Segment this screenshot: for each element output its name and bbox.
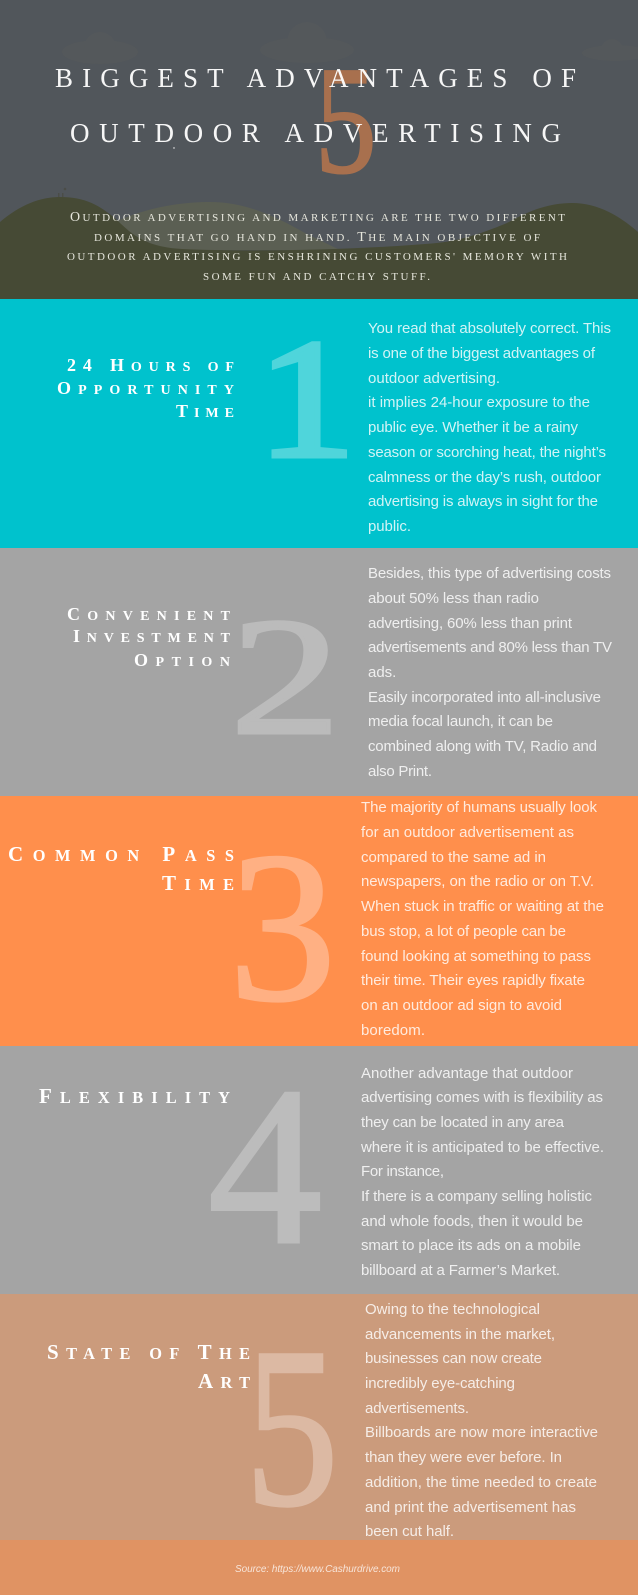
- body text: Owing to the technological: [365, 1301, 540, 1318]
- intro text: OUTDOOR ADVERTISING AND MARKETING ARE THE TWO DIFFERENT: [70, 210, 565, 225]
- heading: O PPORTUNITY: [57, 378, 234, 398]
- title: [55, 63, 576, 149]
- panel: 5 state of the art: [0, 1294, 638, 1554]
- body text: If there is a company selling holistic: [361, 1188, 592, 1205]
- body text: The majority of humans usually look: [361, 799, 598, 816]
- body text: advertising, 60% less than print: [368, 615, 573, 632]
- panel: header: [0, 0, 638, 299]
- body text: been cut half.: [365, 1523, 454, 1540]
- heading: O PTION: [134, 650, 230, 670]
- body text: advertisements and 80% less than TV: [368, 639, 612, 656]
- heading: C ONVENIENT: [67, 604, 231, 624]
- heading: [47, 1340, 250, 1393]
- body text: and print the advertisement has: [365, 1499, 576, 1516]
- heading: [57, 355, 234, 421]
- panel: 4 flexibility: [0, 1042, 638, 1294]
- heading: T IME: [176, 401, 234, 421]
- body text: season or scorching heat, the night’s: [368, 444, 606, 461]
- heading: F LEXIBILITY: [39, 1084, 230, 1108]
- big number 1: 1: [257, 305, 356, 493]
- body text: incredibly eye-catching: [365, 1375, 515, 1392]
- icon: hills: [0, 197, 638, 299]
- body text: their time. Their eyes rapidly fixate: [361, 972, 585, 989]
- body text: public eye. Whether it be a rainy: [368, 419, 578, 436]
- body text: [360, 1065, 604, 1279]
- body text: is one of the biggest advantages of: [368, 345, 596, 362]
- body text: found looking at something to pass: [361, 948, 591, 965]
- body text: advertising comes with is flexibility as: [361, 1089, 603, 1106]
- body text: about 50% less than radio: [368, 590, 539, 607]
- body text: advertising is always in sight for the: [368, 493, 598, 510]
- panel: 2 convenient investment option: [0, 548, 638, 796]
- panel: 1 24 hours of opportunity time: [0, 299, 638, 548]
- intro text: [67, 210, 567, 283]
- intro text: SOME FUN AND CATCHY STUFF.: [203, 271, 430, 283]
- big number 5: 5: [315, 36, 377, 206]
- body text: When stuck in traffic or waiting at the: [361, 898, 604, 915]
- heading: S TATE OF T HE: [47, 1340, 250, 1364]
- body text: Another advantage that outdoor: [361, 1065, 573, 1082]
- body text: on an outdoor ad sign to avoid: [361, 997, 562, 1014]
- heading: A RT: [198, 1369, 250, 1393]
- body text: media focal launch, it can be: [368, 713, 553, 730]
- body text: For instance,: [361, 1163, 444, 1180]
- title: OUTDOOR ADVERTISING: [70, 118, 561, 148]
- body text: addition, the time needed to create: [365, 1474, 597, 1491]
- body text: calmness or the day’s rush, outdoor: [368, 469, 601, 486]
- body text: than they were ever before. In: [365, 1449, 562, 1466]
- icon: clouds: [62, 22, 638, 64]
- body text: newspapers, on the radio or on T.V.: [361, 873, 594, 890]
- body text: outdoor advertising.: [368, 370, 500, 387]
- body text: also Print.: [368, 763, 432, 780]
- body text: billboard at a Farmer’s Market.: [361, 1262, 560, 1279]
- body text: boredom.: [361, 1022, 425, 1039]
- big number 2: 2: [230, 584, 341, 770]
- body text: and whole foods, then it would be: [361, 1213, 583, 1230]
- heading: [8, 842, 234, 895]
- body text: businesses can now create: [365, 1350, 542, 1367]
- big number 5: 5: [245, 1302, 338, 1554]
- heading: 24 H OURS OF: [67, 355, 234, 375]
- body text: smart to place its ads on a mobile: [361, 1237, 581, 1254]
- body text: You read that absolutely correct. This: [368, 320, 611, 337]
- body text: combined along with TV, Radio and: [368, 738, 597, 755]
- intro text: OUTDOOR ADVERTISING IS ENSHRINING CUSTOMERS' MEMORY WITH: [67, 251, 567, 263]
- body text: compared to the same ad in: [361, 849, 546, 866]
- title: BIGGEST ADVANTAGES OF: [55, 63, 576, 93]
- body text: for an outdoor advertisement as: [361, 824, 574, 841]
- source text: Source: https://www.Cashurdrive.com: [235, 1564, 400, 1575]
- intro text: DOMAINS THAT GO HAND IN HAND. THE MAIN OBJECTIVE OF: [94, 230, 540, 245]
- body text: [368, 320, 611, 535]
- body text: ads.: [368, 664, 396, 681]
- body text: [365, 1301, 598, 1540]
- body text: advancements in the market,: [365, 1326, 555, 1343]
- body text: Besides, this type of advertising costs: [368, 565, 611, 582]
- panel: 3 common pass time: [0, 796, 638, 1046]
- panel: footer: [0, 1540, 638, 1595]
- body text: public.: [368, 518, 411, 535]
- heading: T IME: [162, 871, 234, 895]
- body text: [361, 799, 604, 1039]
- icon: tiny figures on hill: [58, 188, 66, 197]
- body text: where it is anticipated to be effective.: [360, 1139, 604, 1156]
- body text: advertisements.: [365, 1400, 469, 1417]
- heading: I NVESTMENT: [73, 626, 231, 646]
- body text: they can be located in any area: [361, 1114, 565, 1131]
- heading: C OMMON P ASS: [8, 842, 234, 866]
- body text: [368, 565, 612, 780]
- body text: Billboards are now more interactive: [365, 1424, 598, 1441]
- heading: [67, 604, 231, 670]
- icon: middle hill: [115, 202, 340, 250]
- big number 3: 3: [229, 809, 336, 1046]
- big number 4: 4: [208, 1042, 322, 1292]
- body text: it implies 24-hour exposure to the: [368, 394, 590, 411]
- body text: bus stop, a lot of people can be: [361, 923, 566, 940]
- body text: Easily incorporated into all-inclusive: [368, 689, 601, 706]
